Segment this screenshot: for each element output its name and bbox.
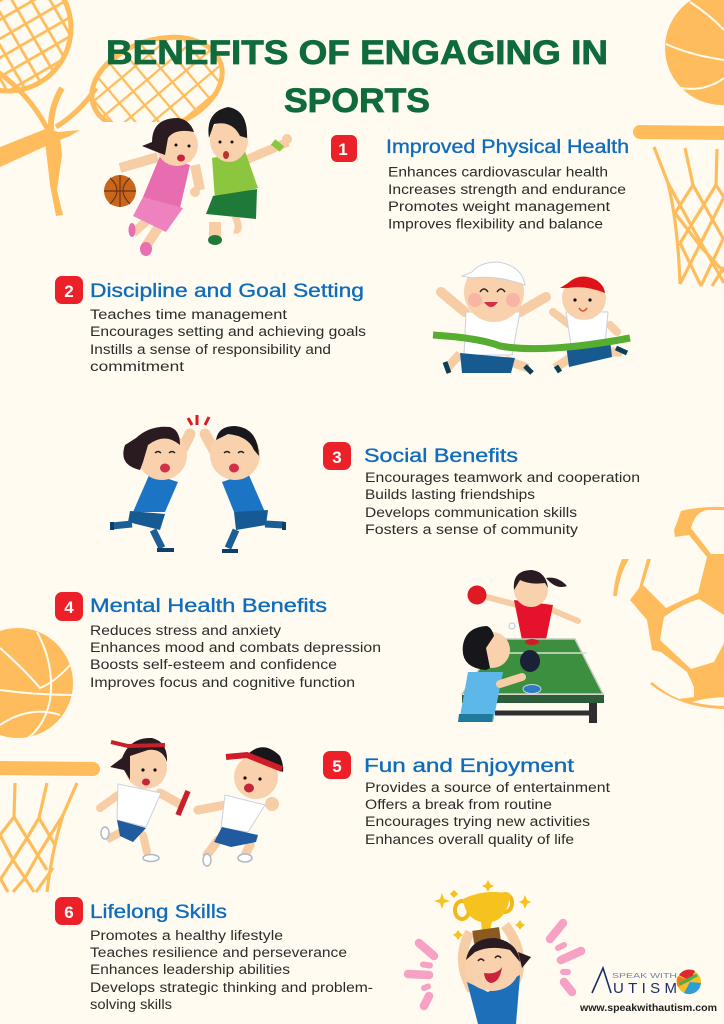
logo: Speak With Autism: UTISM [613,980,677,997]
section 5: Fun and Enjoyment: Provides a source of entertainment [365,780,610,795]
section 2: Discipline and Goal Setting: Instills a sense of responsibility and [90,342,331,357]
section 6: Lifelong Skills: Develops strategic thinking and problem- [90,980,373,995]
section 2: Discipline and Goal Setting [90,281,366,374]
badge 4 [55,592,83,621]
section 3: Social Benefits: Encourages teamwork and cooperation [365,470,640,485]
section 3: Social Benefits: Builds lasting friendships [365,487,535,502]
decoration: basketball left [0,628,73,738]
section 6: Lifelong Skills: Enhances leadership abilities [90,962,290,977]
badge 4: 4 [64,598,74,617]
badge 2 [55,276,83,304]
decoration: basketball hoop top right [640,132,724,286]
section 1: Improved Physical Health: Enhances cardiovascular health [388,164,608,180]
section 4: Mental Health Benefits: Improves focus and cognitive function [90,675,355,690]
section 4: Mental Health Benefits: Boosts self-esteem and confidence [90,657,337,672]
badge 6 [55,897,83,925]
section 2: Discipline and Goal Setting: Encourages setting and achieving goals [90,324,366,339]
section 4: Mental Health Benefits: Enhances mood and combats depression [90,640,381,655]
decoration: tennis rackets [0,0,234,216]
section 6: Lifelong Skills [90,902,373,1012]
title: SPORTS [284,82,430,120]
section 5: Fun and Enjoyment: Offers a break from routine [365,797,552,812]
badge 5: 5 [332,757,342,776]
illustration: child holding trophy [408,880,581,1024]
section 1: Improved Physical Health: Promotes weight management [388,199,610,214]
badge 3 [323,442,351,470]
section 1: Improved Physical Health [386,137,629,232]
illustration: kids high five [112,415,284,551]
decoration: basketball hoop left [0,768,93,892]
title [106,34,608,120]
section 5: Fun and Enjoyment [364,756,610,847]
section 2: Discipline and Goal Setting: commitment [90,359,184,374]
illustration: table tennis players [458,570,604,723]
section 6: Lifelong Skills: Teaches resilience and perseverance [90,945,347,960]
section 4: Mental Health Benefits [90,596,381,690]
badge 1: 1 [338,140,348,159]
badge 1 [331,135,357,162]
section 6: Lifelong Skills: Lifelong Skills [90,902,227,923]
decoration: soccer ball [613,507,724,709]
section 6: Lifelong Skills: Promotes a healthy lifestyle [90,928,283,943]
section 1: Improved Physical Health: Improves flexibility and balance [388,216,603,232]
illustration: kids at the finish line [433,262,630,373]
badge 5 [323,751,351,779]
illustration: two kids playing basketball [104,107,292,256]
title: BENEFITS OF ENGAGING IN [106,34,608,72]
badge 2: 2 [64,282,74,301]
section 6: Lifelong Skills: solving skills [90,997,172,1012]
section 2: Discipline and Goal Setting: Discipline and Goal Setting [90,281,364,302]
decoration: basketball top right [665,0,724,105]
logo: Speak With Autism [592,968,701,997]
section 2: Discipline and Goal Setting: Teaches time management [90,307,287,322]
badge 6: 6 [64,903,74,922]
section 4: Mental Health Benefits: Mental Health Benefits [90,596,327,617]
section 3: Social Benefits [364,446,640,537]
section 5: Fun and Enjoyment: Encourages trying new activities [365,814,590,829]
section 3: Social Benefits: Develops communication skills [365,505,577,520]
section 1: Improved Physical Health: Increases strength and endurance [388,182,626,197]
logo: Speak With Autism: SPEAK WITH [612,971,677,980]
section 4: Mental Health Benefits: Reduces stress and anxiety [90,623,281,638]
website url: www.speakwithautism.com [579,1002,717,1014]
section 1: Improved Physical Health: Improved Physical Health [386,137,629,158]
badge 3: 3 [332,448,342,467]
illustration: relay runners [100,738,283,866]
section 3: Social Benefits: Social Benefits [364,446,518,467]
section 5: Fun and Enjoyment: Enhances overall quality of life [365,832,574,847]
section 3: Social Benefits: Fosters a sense of community [365,522,578,537]
section 5: Fun and Enjoyment: Fun and Enjoyment [364,756,575,777]
